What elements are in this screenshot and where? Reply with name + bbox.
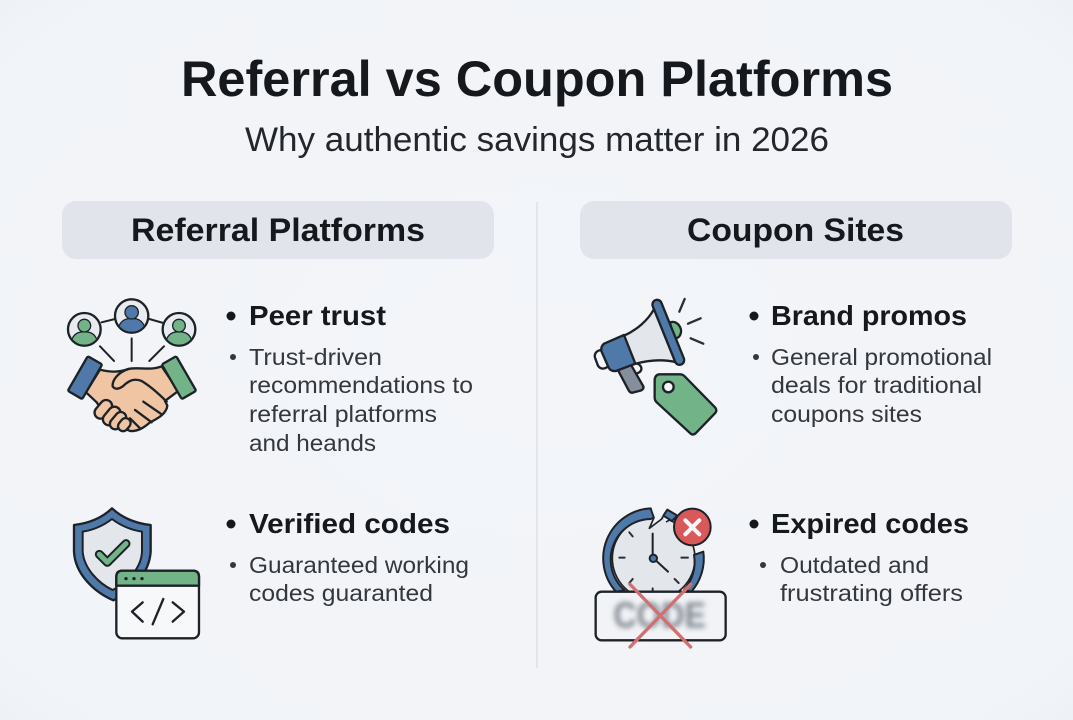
feature: brand promos xyxy=(750,300,992,427)
heading: referral platforms xyxy=(62,201,494,259)
feature: brand promos: Brand promos xyxy=(771,300,967,331)
feature: expired codes: Outdated and xyxy=(780,552,929,578)
feature: peer trust: Peer trust xyxy=(249,300,386,331)
heading: referral platforms: Referral Platforms xyxy=(131,212,425,248)
feature: verified codes: codes guaranted xyxy=(249,580,433,606)
heading: coupon sites xyxy=(580,201,1012,259)
feature: verified codes: Guaranteed working xyxy=(249,552,469,578)
feature: expired codes: frustrating offers xyxy=(780,580,963,606)
feature: brand promos: deals for traditional xyxy=(771,372,982,398)
feature: brand promos: General promotional xyxy=(771,344,992,370)
panel: coupon sites xyxy=(580,201,1012,647)
feature: peer trust xyxy=(226,300,473,456)
icon: shield and code window xyxy=(74,508,199,638)
icon: megaphone and price tag xyxy=(593,298,716,435)
feature: verified codes: Verified codes xyxy=(249,508,450,539)
subtitle: Why authentic savings matter in 2026 xyxy=(245,121,829,159)
title: Referral vs Coupon Platforms xyxy=(181,51,893,107)
feature: peer trust: Trust-driven xyxy=(249,344,382,370)
feature: peer trust: recommendations to xyxy=(249,372,473,398)
feature: peer trust: and heands xyxy=(249,430,376,456)
feature: verified codes xyxy=(226,508,469,606)
feature: peer trust: referral platforms xyxy=(249,401,437,427)
icon: handshake with network of people xyxy=(68,299,196,433)
icon: expired clock with blurred code xyxy=(596,508,726,647)
feature: expired codes: Expired codes xyxy=(771,508,969,539)
feature: brand promos: coupons sites xyxy=(771,401,922,427)
panel: referral platforms xyxy=(62,201,494,638)
feature: expired codes xyxy=(750,508,969,606)
icon: expired clock with blurred code: CODE xyxy=(613,595,706,636)
heading: coupon sites: Coupon Sites xyxy=(687,212,904,248)
